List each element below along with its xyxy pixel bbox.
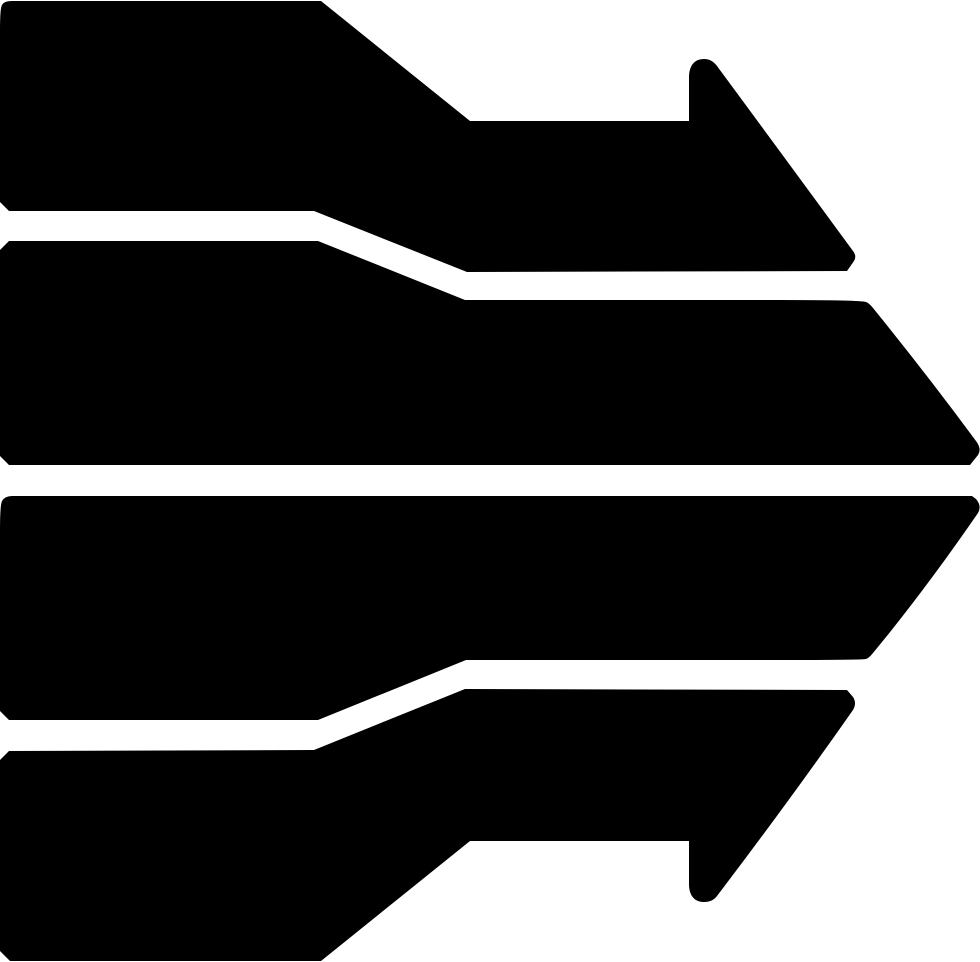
arrow segment: bottom: [0, 689, 855, 961]
arrow segment: top: [0, 1, 855, 272]
arrow segment: upper middle: [0, 241, 980, 465]
arrow segment: lower middle: [0, 496, 980, 720]
